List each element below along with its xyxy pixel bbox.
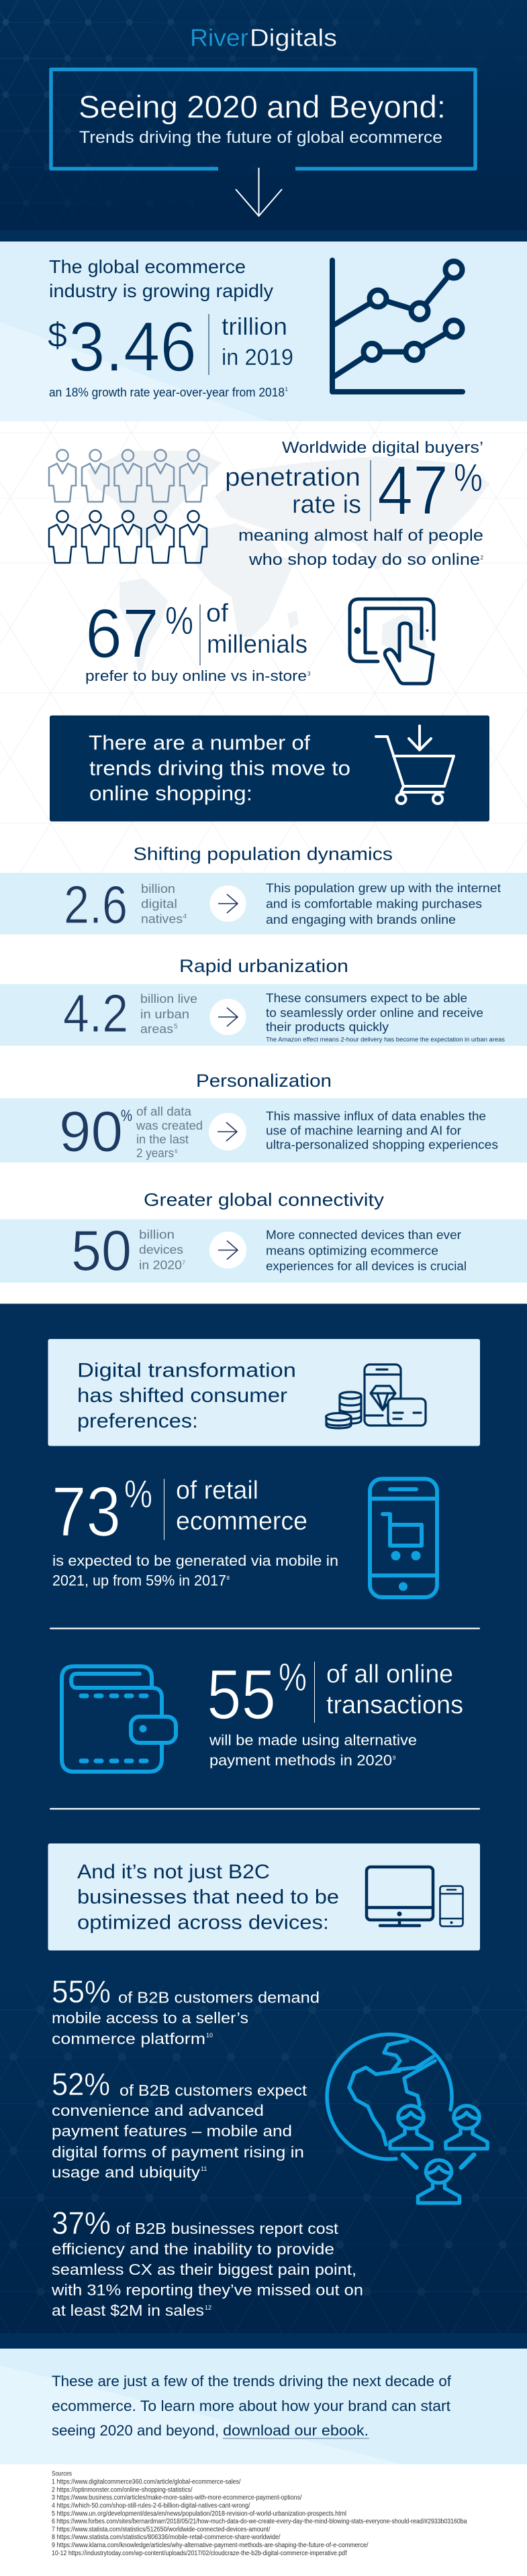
growth note: an 18% growth rate year-over-year from 2018 xyxy=(49,386,285,399)
closing text: ecommerce. To learn more about how your brand can start xyxy=(52,2398,450,2414)
sources list: 10-12 https://industrytoday.com/wp-content/uploads/2017/02/cloudcraze-the-b2b-digital-commerce-imperative.pdf xyxy=(52,2550,347,2557)
closing text: These are just a few of the trends driving the next decade of xyxy=(52,2373,452,2390)
arrow: down xyxy=(236,168,282,216)
stat: 47% penetration rate: Worldwide digital buyers’ xyxy=(282,439,483,457)
stat: 47% penetration rate xyxy=(225,439,483,569)
sources list: Sources xyxy=(52,2471,72,2478)
stat: 52% of B2B customers: convenience and advanced xyxy=(52,2102,264,2119)
trend row: 90% of data: 6 xyxy=(175,1148,178,1155)
stat: 73% of retail ecommerce: is expected to be generated via mobile in xyxy=(52,1552,338,1569)
title: Seeing 2020 and Beyond: xyxy=(79,89,446,125)
stat: 55% of B2B customers: 10 xyxy=(206,2032,213,2039)
trend row: 90% of data: 2 years xyxy=(136,1146,174,1160)
sources list xyxy=(52,2471,467,2557)
sources list: 3 https://www.business.com/articles/make-more-sales-with-more-ecommerce-payment-options/ xyxy=(52,2494,302,2502)
stat: 73% of retail ecommerce: % xyxy=(124,1472,152,1516)
stat: 73% of retail ecommerce: ecommerce xyxy=(176,1507,307,1536)
trend row: 50 billion devices: means optimizing ecommerce xyxy=(266,1244,438,1258)
logo: Digitals xyxy=(250,24,337,51)
trend row: 90% of data xyxy=(0,1098,527,1164)
trend row: 4.2 billion urban: 5 xyxy=(174,1023,178,1030)
sources list: 8 https://www.statista.com/statistics/806336/mobile-retail-commerce-share-worldwide/ xyxy=(52,2534,281,2541)
stat: 55% of online transactions: % xyxy=(279,1656,307,1699)
stat: 55% of online transactions: 9 xyxy=(393,1755,396,1761)
heading: personalization: Personalization xyxy=(196,1071,332,1091)
stat: 52% of B2B customers: usage and ubiquity xyxy=(52,2163,201,2181)
stat: 52% of B2B customers: 52% xyxy=(52,2066,110,2102)
stat: 47% penetration rate: 47 xyxy=(377,452,448,530)
trend row: 50 billion devices: experiences for all devices is crucial xyxy=(266,1258,467,1273)
heading: shifting population dynamics: Shifting population dynamics xyxy=(133,844,393,864)
stat: 37% of B2B businesses: seamless CX as their biggest pain point, xyxy=(52,2261,356,2278)
trend row: 90% of data: 90 xyxy=(59,1100,123,1164)
stat: 37% of B2B businesses: 37% xyxy=(52,2205,111,2241)
stat: 47% penetration rate: % xyxy=(454,456,483,500)
panel heading: There are a number of xyxy=(89,731,310,754)
stat: $3.46 trillion: 3.46 xyxy=(68,308,197,386)
stat: 73% of retail ecommerce: 73 xyxy=(52,1472,121,1551)
panel: global ecommerce growth xyxy=(0,241,527,421)
panel heading: And it’s not just B2C xyxy=(77,1861,270,1883)
panel heading: businesses that need to be xyxy=(77,1886,339,1909)
trend row: 2.6 billion digital natives: and engaging with brands online xyxy=(266,912,456,926)
stat: 52% of B2B customers: payment features – mobile and xyxy=(52,2123,292,2140)
icon: line chart xyxy=(332,260,463,392)
stat: 55% of B2B customers: 55% xyxy=(52,1974,111,2009)
stat: 67% of millenials: prefer to buy online vs in-store xyxy=(85,667,307,684)
panel heading: trends driving this move to xyxy=(89,757,350,780)
trend row: 50 billion devices: 50 xyxy=(71,1220,132,1283)
stat: 55% of B2B customers: mobile access to a seller’s xyxy=(52,2009,248,2027)
trend row: 50 billion devices: More connected devices than ever xyxy=(266,1228,461,1242)
logo: River xyxy=(190,24,248,51)
stat: 47% penetration rate: who shop today do so online xyxy=(248,551,480,569)
trend row: 50 billion devices: billion xyxy=(139,1228,175,1241)
icon: globe with connected people xyxy=(327,2035,487,2203)
stat: $3.46 trillion: $ xyxy=(48,316,67,355)
trend row: 4.2 billion urban: 4.2 xyxy=(63,983,128,1043)
stat: 37% of B2B businesses: of B2B businesses report cost xyxy=(116,2220,339,2237)
trend row: 90% of data: This massive influx of data enables the xyxy=(266,1109,486,1123)
stat: 73% of retail ecommerce: of retail xyxy=(176,1477,258,1505)
stat: 55% of online transactions: of all online xyxy=(326,1660,453,1688)
panel heading xyxy=(77,1861,339,1933)
subtitle: Trends driving the future of global ecommerce xyxy=(79,128,442,147)
stat: 73% of retail ecommerce: 8 xyxy=(227,1575,230,1581)
sources list: 2 https://optinmonster.com/online-shopping-statistics/ xyxy=(52,2486,193,2493)
stat: 37% of B2B businesses: efficiency and the inability to provide xyxy=(52,2240,334,2257)
panel heading: preferences: xyxy=(77,1410,198,1432)
trend row: 90% of data: use of machine learning and AI for xyxy=(266,1123,461,1138)
stat: 52% of B2B customers xyxy=(52,2066,307,2181)
panel heading: Digital transformation xyxy=(77,1360,296,1382)
panel heading xyxy=(89,731,350,805)
stat: $3.46 trillion xyxy=(48,308,293,386)
trend row: 90% of data: % xyxy=(121,1107,132,1125)
trend row: 90% of data: was created xyxy=(136,1119,203,1132)
trend row: 4.2 billion urban: areas xyxy=(140,1022,173,1036)
panel heading: optimized across devices: xyxy=(77,1912,329,1933)
stat: 67% of millenials: millenials xyxy=(207,631,307,659)
growth note: 1 xyxy=(285,386,289,392)
panel: not just B2C xyxy=(48,1843,480,1951)
stat: 37% of B2B businesses: 12 xyxy=(205,2304,211,2311)
icon: phone with cart xyxy=(370,1479,437,1597)
background: world map xyxy=(0,421,527,877)
panel: digital transformation xyxy=(48,1339,480,1446)
trend row: 2.6 billion digital natives: natives xyxy=(141,912,183,926)
closing text xyxy=(52,2373,452,2439)
trend row: 2.6 billion digital natives: billion xyxy=(141,882,175,896)
trend row: 2.6 billion digital natives: 2.6 xyxy=(64,875,128,934)
stat: 55% of B2B customers: commerce platform xyxy=(52,2030,205,2047)
stat: 55% of online transactions: transactions xyxy=(326,1691,463,1719)
trend row: 2.6 billion digital natives xyxy=(0,873,527,934)
dark section background xyxy=(0,1303,527,2349)
stat: 55% of online transactions: 55 xyxy=(207,1656,276,1734)
icon: people grid xyxy=(49,449,207,563)
header background xyxy=(0,0,527,241)
trend row: 90% of data: ultra-personalized shopping experiences xyxy=(266,1138,498,1152)
trend row: 50 billion devices: devices xyxy=(139,1243,183,1256)
icon: phone, coins, diamond, card xyxy=(326,1364,426,1428)
stat: 47% penetration rate: meaning almost half of people xyxy=(238,527,483,545)
icon: monitor and phone xyxy=(367,1867,463,1927)
sources list: 5 https://www.un.org/development/desa/en/news/population/2018-revision-of-world-urbanization-prospects.html xyxy=(52,2510,346,2518)
trend row: 2.6 billion digital natives: and is comfortable making purchases xyxy=(266,896,482,911)
title frame xyxy=(51,70,475,169)
stat: 47% penetration rate: penetration xyxy=(225,464,361,492)
stat: 37% of B2B businesses xyxy=(51,2205,363,2319)
stat: 52% of B2B customers: 11 xyxy=(201,2165,207,2172)
stat: 67% of millenials: of xyxy=(206,600,228,628)
stat: 55% of online transactions xyxy=(207,1656,463,1768)
stat: 52% of B2B customers: of B2B customers expect xyxy=(119,2082,307,2099)
trend row: 90% of data: of all data xyxy=(136,1105,192,1118)
stat: 55% of online transactions: payment methods in 2020 xyxy=(209,1752,392,1768)
stat: 52% of B2B customers: digital forms of payment rising in xyxy=(52,2143,304,2161)
closing text: download our ebook. xyxy=(223,2422,369,2439)
trend row: 2.6 billion digital natives: This population grew up with the internet xyxy=(266,881,501,895)
icon: shopping cart xyxy=(376,726,454,804)
heading: rapid urbanization: Rapid urbanization xyxy=(179,956,348,976)
panel: trends driving online shopping xyxy=(50,715,489,821)
stat: 67% of millenials: % xyxy=(165,599,193,643)
trend row: 4.2 billion urban: billion live xyxy=(140,992,197,1006)
stat: 47% penetration rate: rate is xyxy=(292,491,361,519)
sources list: 6 https://www.forbes.com/sites/bernardmarr/2018/05/21/how-much-data-do-we-create-every-day-the-mind-blowing-stats-everyone-should-read/#2933b03160ba xyxy=(52,2518,467,2526)
logo xyxy=(190,24,337,51)
stat: 55% of online transactions: will be made using alternative xyxy=(209,1732,417,1749)
stat: 55% of B2B customers: of B2B customers demand xyxy=(118,1989,320,2006)
trend row: 4.2 billion urban: The Amazon effect means 2-hour delivery has become the expectation in urban areas xyxy=(266,1036,505,1044)
stat: 67% of millenials: 67 xyxy=(85,595,159,673)
stat: 47% penetration rate: 2 xyxy=(481,555,483,561)
panel: closing call to action xyxy=(0,2349,527,2465)
sources list: 7 https://www.statista.com/statistics/512650/worldwide-connected-devices-amount/ xyxy=(52,2526,271,2533)
trend row: 50 billion devices: 7 xyxy=(183,1260,185,1266)
closing text: seeing 2020 and beyond, xyxy=(52,2422,219,2439)
sources list: 9 https://www.klarna.com/knowledge/articles/why-alternative-payment-methods-are-shaping-the-future-of-e-commerce/ xyxy=(52,2542,369,2549)
stat: 67% of millenials xyxy=(85,595,311,684)
intro text xyxy=(49,256,273,301)
intro text: industry is growing rapidly xyxy=(49,280,273,301)
sources list: 4 https://which-50.com/shop-still-rules-2-6-billion-digital-natives-cant-wrong/ xyxy=(52,2502,250,2510)
trend row: 4.2 billion urban: their products quickly xyxy=(266,1020,389,1034)
stat: 37% of B2B businesses: at least $2M in sales xyxy=(52,2302,204,2319)
stat: $3.46 trillion: trillion xyxy=(222,313,287,340)
icon: wallet xyxy=(62,1666,176,1772)
intro text: The global ecommerce xyxy=(49,256,246,277)
stat: 73% of retail ecommerce: 2021, up from 59% in 2017 xyxy=(52,1572,226,1589)
trend row: 4.2 billion urban: to seamlessly order online and receive xyxy=(266,1006,483,1020)
stat: $3.46 trillion: in 2019 xyxy=(222,345,293,370)
panel heading: has shifted consumer xyxy=(77,1385,287,1407)
trend row: 4.2 billion urban xyxy=(0,983,527,1046)
stat: 37% of B2B businesses: with 31% reporting they’ve missed out on xyxy=(51,2282,363,2299)
stat: 67% of millenials: 3 xyxy=(307,671,311,677)
trend row: 90% of data: in the last xyxy=(136,1132,189,1146)
trend row: 4.2 billion urban: These consumers expect to be able xyxy=(266,991,467,1005)
sources list: 1 https://www.digitalcommerce360.com/article/global-ecommerce-sales/ xyxy=(52,2478,241,2486)
icon: tablet with pointing hand xyxy=(350,599,434,684)
trend row: 4.2 billion urban: in urban xyxy=(140,1008,189,1021)
trend row: 50 billion devices xyxy=(0,1220,527,1283)
panel heading: online shopping: xyxy=(89,782,252,805)
heading: greater global connectivity: Greater global connectivity xyxy=(144,1190,385,1210)
stat: 73% of retail ecommerce xyxy=(52,1472,338,1589)
trend row: 2.6 billion digital natives: 4 xyxy=(183,913,187,920)
trend row: 50 billion devices: in 2020 xyxy=(139,1258,182,1272)
panel heading xyxy=(77,1360,296,1432)
stat: 55% of B2B customers xyxy=(52,1974,320,2047)
trend row: 2.6 billion digital natives: digital xyxy=(141,898,177,911)
